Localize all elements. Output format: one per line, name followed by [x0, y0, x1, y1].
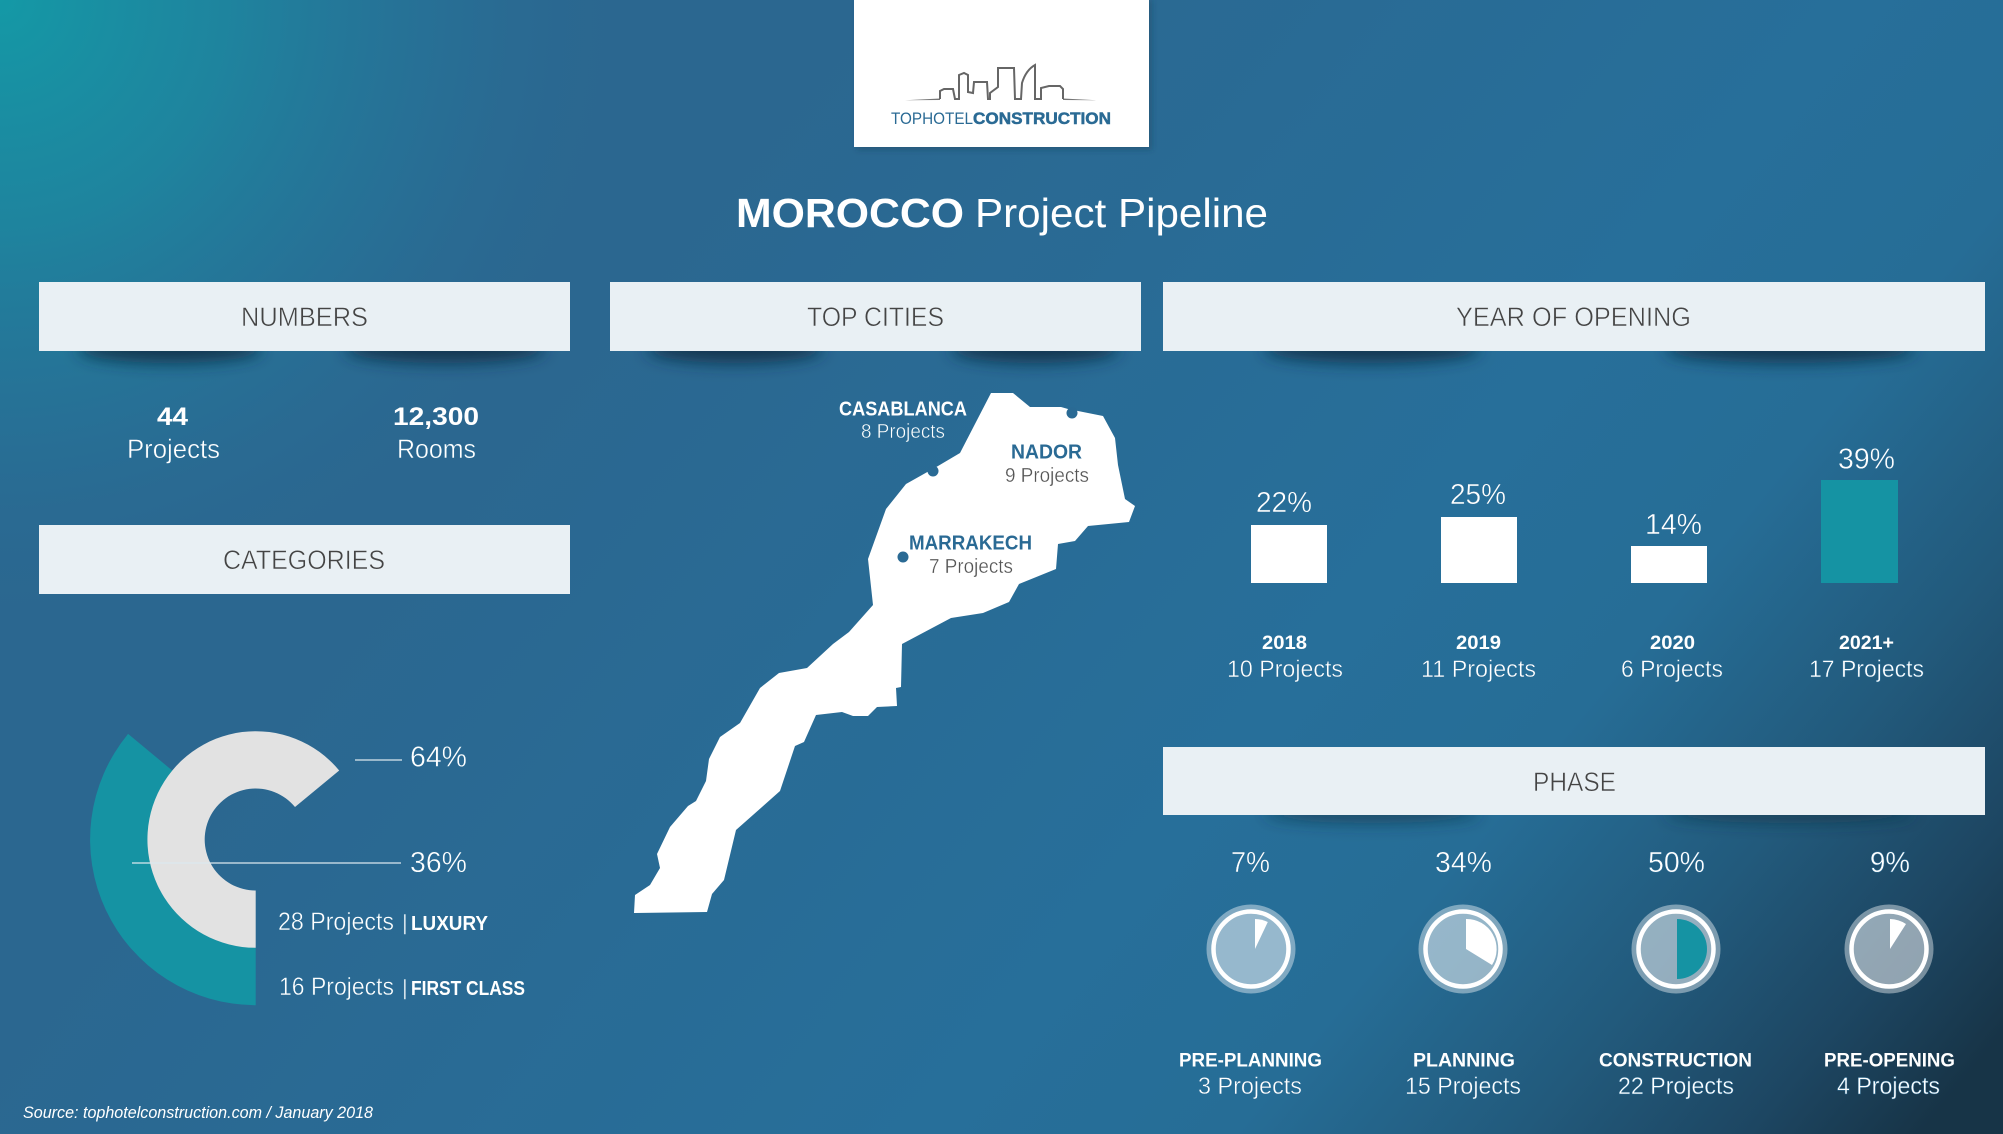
phase: pre-planning: 3 Projects	[1198, 1073, 1302, 1100]
phase: pre-planning	[1179, 847, 1322, 1100]
bar: 2020: 6 Projects	[1621, 656, 1723, 683]
legend: first class: FIRST CLASS	[411, 978, 525, 1000]
phase: pre-planning: 7%	[1231, 847, 1270, 879]
percentage: luxury: 64%	[410, 742, 467, 774]
city label: Marrakech	[909, 532, 1032, 578]
city label: Casablanca	[839, 398, 967, 443]
phase: pre-planning: PRE-PLANNING	[1179, 1050, 1322, 1072]
city label: Nador: 9 Projects	[1005, 465, 1089, 487]
legend: luxury: |	[402, 910, 408, 935]
phase: construction: CONSTRUCTION	[1599, 1050, 1752, 1072]
city label: Nador	[1005, 442, 1089, 487]
phase: pre-opening	[1824, 847, 1955, 1100]
panel: numbers: 12,300	[393, 403, 479, 431]
panel: numbers: 44	[157, 403, 188, 431]
phase: planning: 15 Projects	[1405, 1073, 1521, 1100]
panel: categories	[39, 525, 570, 1005]
panel: numbers: Projects	[127, 434, 220, 464]
phase: construction: 50%	[1648, 847, 1705, 879]
legend: first class: 16 Projects	[279, 973, 394, 1001]
bar: 2019: 2019	[1456, 633, 1501, 654]
bar: 2020: 2020	[1650, 633, 1695, 654]
phase: planning	[1405, 847, 1521, 1100]
panel: top cities	[610, 282, 1141, 913]
bar: 2020: 14%	[1645, 509, 1702, 541]
bar: 2019	[1421, 479, 1536, 683]
map of Morocco	[634, 393, 1135, 913]
phase: pre-opening: PRE-OPENING	[1824, 1050, 1955, 1072]
donut chart	[90, 731, 402, 1005]
phase: construction: 22 Projects	[1618, 1073, 1734, 1100]
bar: 2018	[1227, 487, 1343, 683]
panel: numbers: Rooms	[397, 434, 476, 464]
panel: numbers: NUMBERS	[241, 302, 368, 332]
legend: luxury: 28 Projects	[278, 908, 394, 936]
city label: Marrakech: MARRAKECH	[909, 532, 1032, 554]
phase: planning: PLANNING	[1413, 1050, 1515, 1072]
bar: 2021+: 17 Projects	[1809, 656, 1924, 683]
source note: Source: tophotelconstruction.com / January 2018	[23, 1103, 374, 1122]
panel: top cities: TOP CITIES	[807, 302, 944, 332]
phase: pre-opening: 9%	[1870, 847, 1910, 879]
bar: 2018: 22%	[1256, 487, 1312, 519]
phase: construction	[1599, 847, 1752, 1100]
percentage: first class: 36%	[410, 847, 467, 879]
bar: 2018: 2018	[1262, 633, 1307, 654]
panel: categories: CATEGORIES	[223, 545, 385, 575]
legend: luxury: LUXURY	[411, 913, 489, 935]
phase: pre-opening: 4 Projects	[1837, 1073, 1940, 1100]
logo	[854, 0, 1152, 150]
bar: 2020	[1621, 509, 1723, 683]
bar: 2019: 25%	[1450, 479, 1506, 511]
bar: 2018: 10 Projects	[1227, 656, 1343, 683]
phase: planning: 34%	[1435, 847, 1492, 879]
logo: TOPHOTEL	[891, 109, 973, 128]
logo: CONSTRUCTION	[973, 109, 1111, 128]
title: Project Pipeline	[975, 190, 1268, 236]
panel: year of opening: YEAR OF OPENING	[1456, 302, 1691, 332]
city label: Casablanca: 8 Projects	[861, 421, 945, 443]
bar: 2019: 11 Projects	[1421, 656, 1536, 683]
panel: numbers	[39, 282, 570, 464]
panel: phase	[1163, 747, 1985, 1100]
bar: 2021+	[1809, 444, 1924, 683]
city label: Marrakech: 7 Projects	[929, 556, 1013, 578]
legend: luxury	[278, 908, 489, 936]
panel: year of opening	[1163, 282, 1985, 683]
legend: first class: |	[402, 975, 408, 1000]
title	[736, 190, 1268, 236]
panel: phase: PHASE	[1533, 767, 1616, 797]
legend: first class	[279, 973, 525, 1001]
city label: Nador: NADOR	[1011, 442, 1083, 464]
city label: Casablanca: CASABLANCA	[839, 398, 967, 420]
title: MOROCCO	[736, 190, 964, 236]
bar: 2021+: 2021+	[1839, 633, 1894, 654]
bar: 2021+: 39%	[1838, 444, 1895, 476]
